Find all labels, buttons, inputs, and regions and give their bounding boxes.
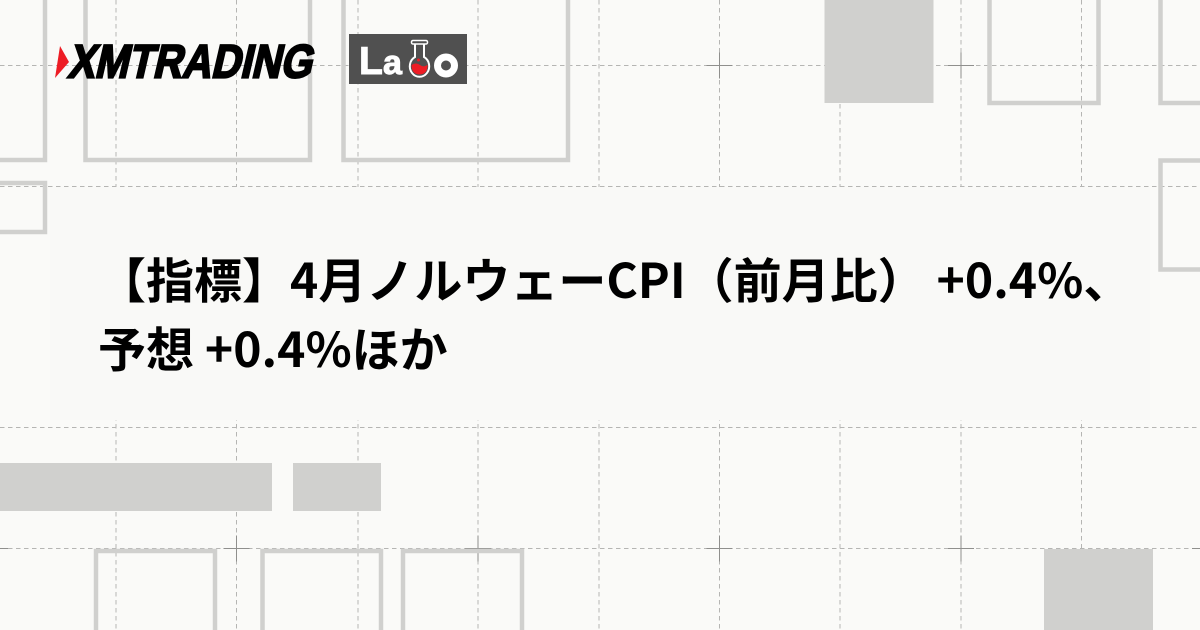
title (98, 242, 1131, 381)
logo: XMTRADING: XMTRADING (65, 36, 321, 88)
logo: Lab (349, 34, 467, 84)
title panel (50, 187, 1150, 420)
logo: Lab: a (383, 44, 403, 82)
title: 【指標】4月ノルウェーCPI（前月比） +0.4%、 (98, 242, 1131, 312)
icon: flask (410, 40, 429, 77)
logo: Lab: L (359, 40, 383, 83)
title: 予想 +0.4%ほか (98, 311, 448, 381)
